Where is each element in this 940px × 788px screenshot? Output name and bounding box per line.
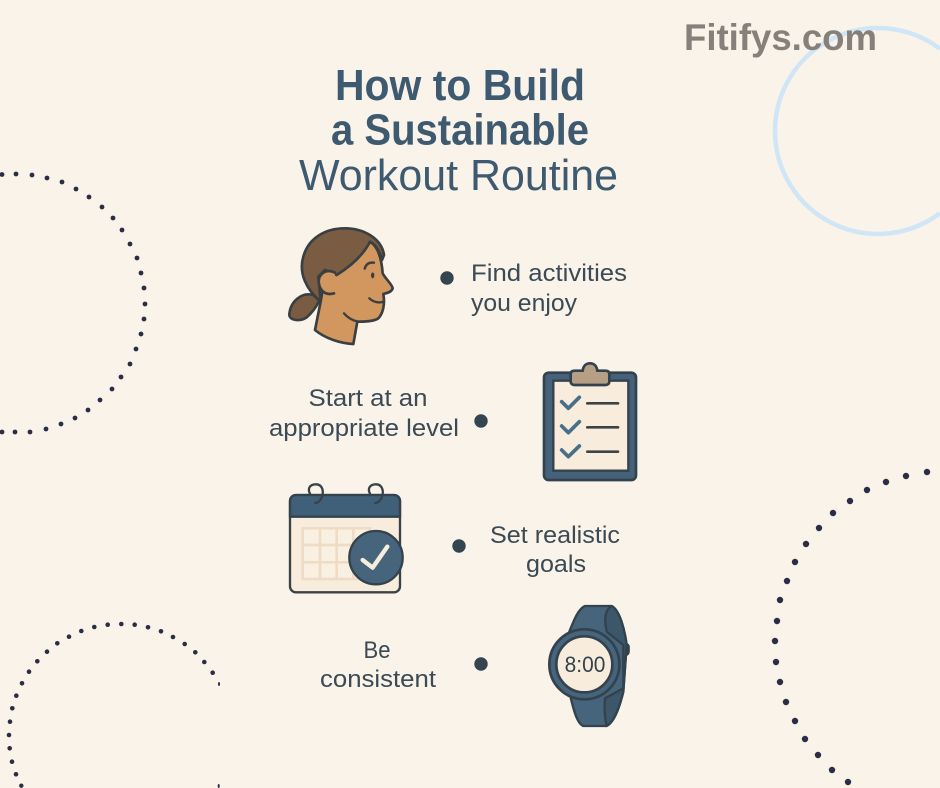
text: set realistic goals: Set realistic (490, 522, 620, 549)
bullet 2 (474, 414, 488, 428)
text: set realistic goals: goals (526, 551, 586, 578)
text: find activities (471, 260, 627, 317)
title: How to Build (335, 61, 585, 110)
dotted circle bottom left (7, 622, 220, 788)
text: start at an appropriate level: appropriate level (269, 415, 459, 442)
icon: calendar (290, 484, 403, 592)
dotted circle left (0, 172, 147, 434)
icon: smartwatch (549, 606, 629, 726)
bullet 3 (452, 539, 466, 553)
title: a Sustainable (331, 106, 589, 154)
dotted circle bottom right (772, 469, 930, 785)
bullet 1 (440, 271, 454, 285)
text: find activities: you enjoy (471, 290, 578, 317)
text: find activities: Find activities (471, 260, 627, 287)
title (299, 61, 618, 200)
text: start at an appropriate level: Start at an (308, 385, 428, 412)
icon: clipboard (544, 363, 636, 480)
text: be consistent: Be (364, 637, 390, 664)
bullet 4 (474, 657, 488, 671)
icon: smartwatch: 8:00 (565, 652, 605, 677)
title: Workout Routine (299, 151, 618, 200)
text: be consistent (320, 637, 436, 693)
text: be consistent: consistent (320, 666, 436, 693)
icon: person head (289, 228, 393, 344)
text: set realistic goals (490, 522, 620, 578)
text: start at an appropriate level (269, 385, 459, 442)
brand name: Fitifys.com (684, 17, 877, 58)
light blue ring decoration (775, 28, 940, 234)
